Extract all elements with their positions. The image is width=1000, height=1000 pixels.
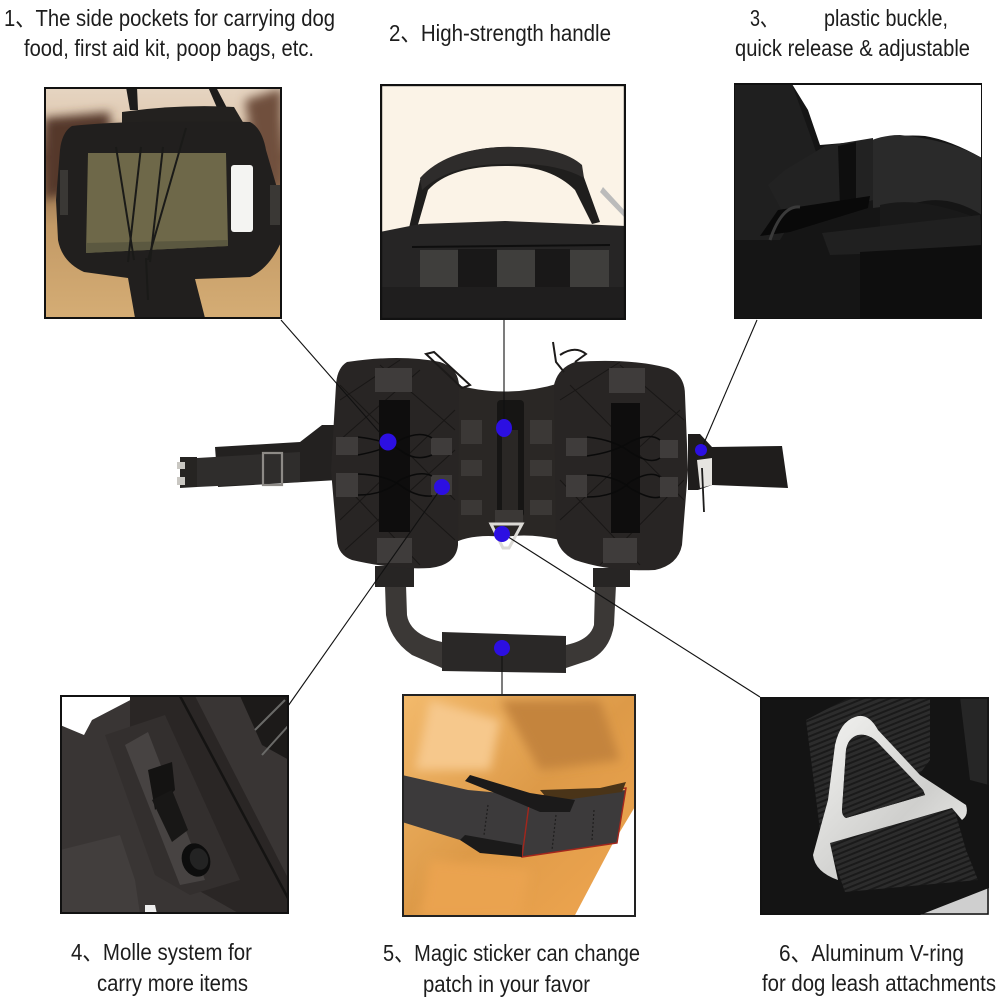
photo panel 4: molle system (60, 695, 289, 914)
lower chest strap (375, 566, 630, 673)
caption 2: handle: 2、High-strength handle (389, 20, 611, 46)
photo panel 5: magic sticker (402, 694, 636, 917)
handle arc (409, 147, 600, 228)
caption 1: side pockets: 1、The side pockets for carrying dog (4, 5, 335, 31)
harness product (177, 342, 788, 673)
webbing strap (828, 808, 978, 892)
caption 1: side pockets (4, 5, 335, 61)
center panel (450, 383, 560, 548)
caption 4: molle: carry more items (97, 970, 248, 996)
caption 5: magic sticker (383, 940, 640, 997)
caption 5: magic sticker: 5、Magic sticker can change (383, 940, 640, 966)
photo panel 6: V-ring (760, 697, 989, 915)
left waist strap with buckle (177, 425, 338, 488)
photo panel 3: buckle (734, 83, 982, 319)
connector lines (281, 320, 760, 706)
left pouch (331, 352, 470, 568)
caption 3: buckle (735, 5, 970, 61)
caption 3: buckle: 3、 (750, 5, 778, 31)
photo panel 2: handle (380, 84, 626, 320)
right strap (688, 434, 788, 512)
caption 1: side pockets: food, first aid kit, poop bags, etc. (24, 35, 314, 61)
callout dots (380, 419, 707, 656)
right pouch (553, 342, 688, 570)
caption 4: molle (71, 939, 252, 996)
collar strap (402, 775, 626, 857)
buckle body (800, 138, 873, 206)
ring opening (842, 735, 925, 818)
caption 5: magic sticker: patch in your favor (423, 971, 590, 997)
aluminum ring (813, 716, 967, 880)
strap (872, 135, 982, 215)
pouch body (56, 122, 282, 318)
caption 3: buckle: plastic buckle, (824, 5, 948, 31)
photo panel 1: side pocket (44, 87, 282, 319)
caption 6: V-ring: 6、Aluminum V-ring (779, 940, 964, 966)
caption 6: V-ring (762, 940, 996, 996)
caption 4: molle: 4、Molle system for (71, 939, 252, 965)
